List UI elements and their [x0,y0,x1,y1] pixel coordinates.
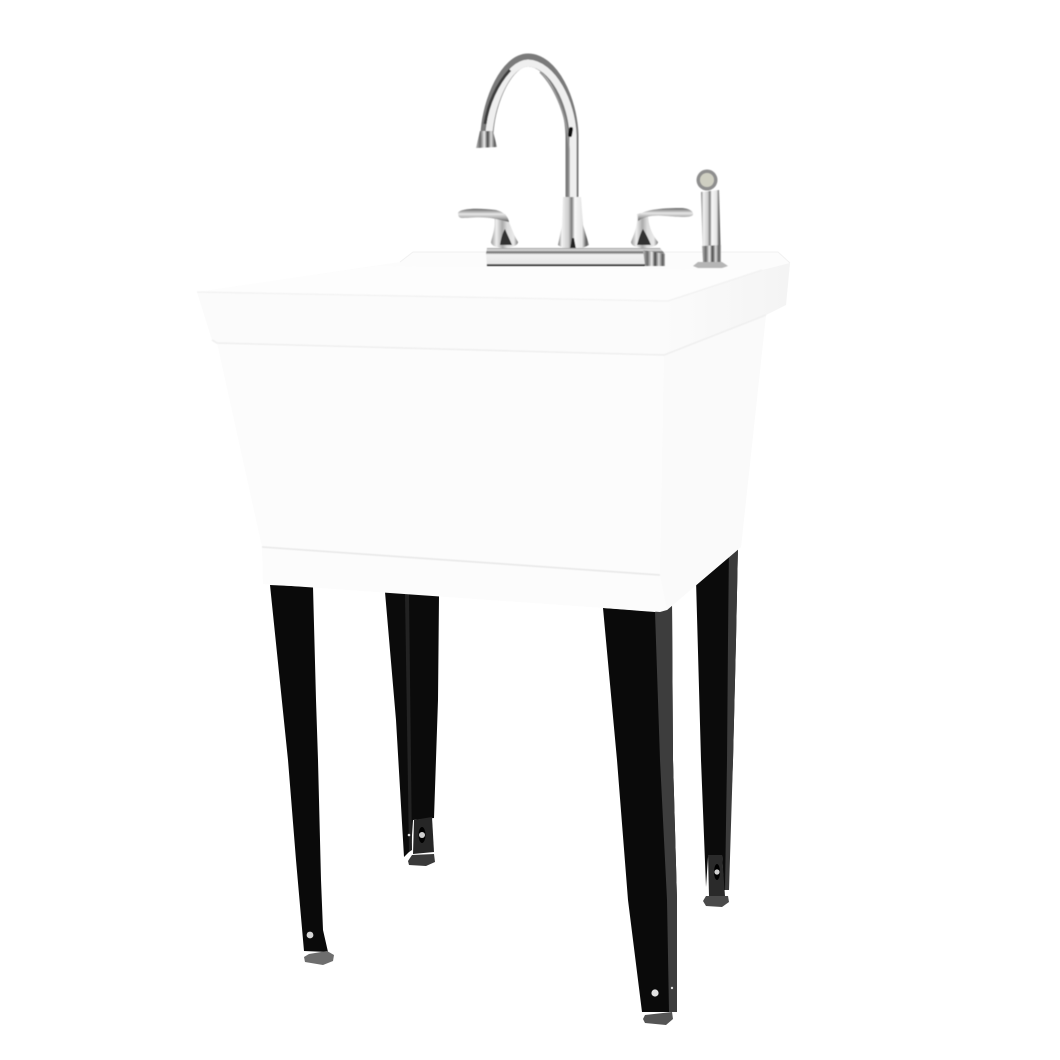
right handle body [631,212,658,248]
leg: back right [696,540,738,907]
faucet spout tip [476,131,497,148]
faucet spout arc [485,60,573,200]
leg: front right [603,603,677,1025]
sink tub body [197,252,790,612]
faucet column base [558,197,589,250]
rim lower edge shadow [212,315,766,355]
left handle body [491,214,518,248]
rim front edge highlight line [197,270,762,301]
leg: front left [270,585,334,965]
tub inner basin [197,266,762,301]
rim front face [197,292,668,355]
faucet plate right end [643,250,665,266]
lower band edge shadow [262,547,660,575]
left handle lever [458,209,509,222]
faucet deck plate [486,248,665,266]
faucet [458,60,728,268]
side sprayer [693,170,728,268]
leg: back left [385,592,439,866]
tub rim right side shading [664,263,790,355]
right handle lever [638,208,693,221]
back deck edge [400,252,790,263]
tub right side panel [660,315,766,610]
